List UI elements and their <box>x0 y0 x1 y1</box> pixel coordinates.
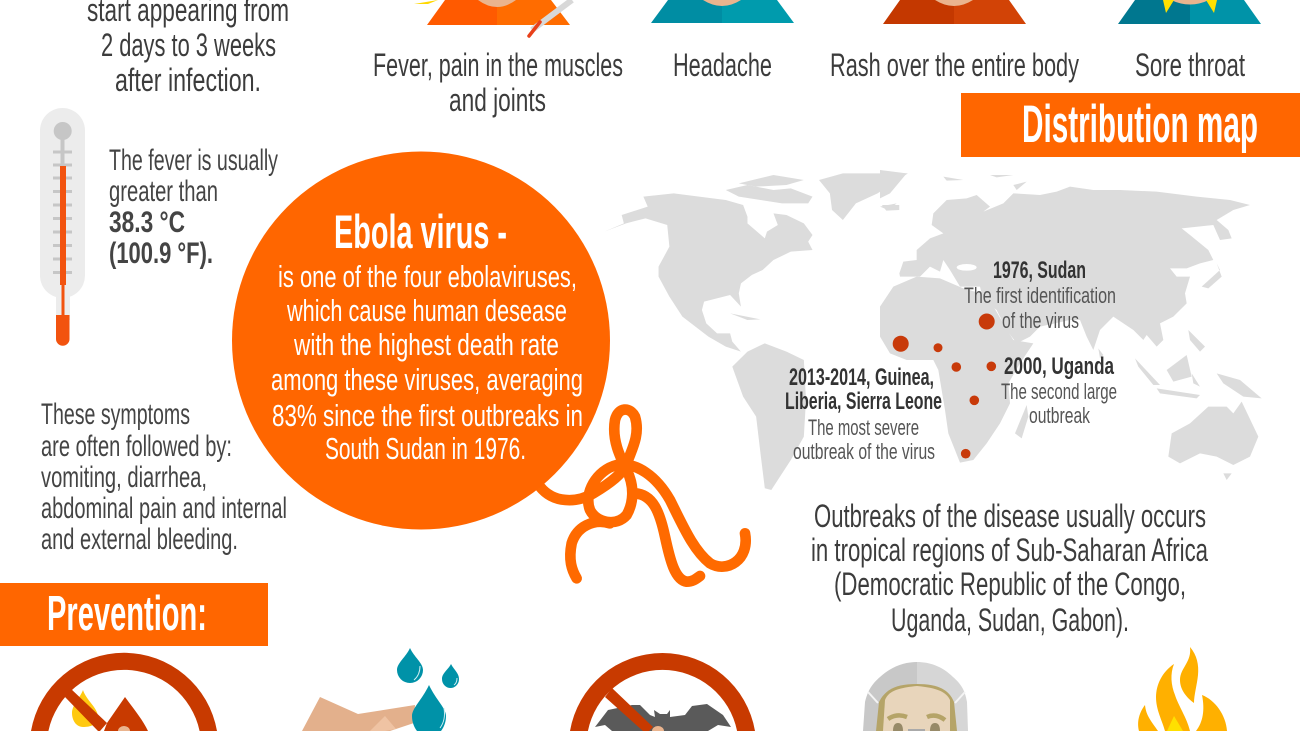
symptom intro text: 2 days to 3 weeks <box>101 27 276 63</box>
map label: 2000 Uganda <box>1001 353 1117 428</box>
map label: 2013-2014: outbreak of the virus <box>793 439 935 464</box>
outbreaks paragraph <box>811 498 1208 638</box>
icon: hand washing with water drops <box>302 648 459 731</box>
map label: 2000 Uganda: outbreak <box>1029 403 1091 428</box>
outbreaks paragraph: Uganda, Sudan, Gabon). <box>891 602 1129 638</box>
symptom labels <box>373 47 1245 118</box>
follow-up symptoms text <box>41 398 287 556</box>
panel: Ebola virus definition circle: is one of the four ebolaviruses, <box>278 259 577 294</box>
fever text: (100.9 °F). <box>109 237 213 270</box>
icon: person with headache <box>651 0 794 23</box>
outbreak markers <box>893 314 996 459</box>
fever text: 38.3 °C <box>109 206 185 239</box>
icon: no contact with fire and blood <box>31 653 217 731</box>
heading: prevention: Prevention: <box>47 587 207 641</box>
map label: 1976 Sudan: The first identification <box>964 283 1116 308</box>
icon: no contact with bats <box>570 653 755 731</box>
map label: 1976 Sudan <box>964 257 1116 333</box>
panel: Ebola virus definition circle <box>232 152 610 530</box>
icon: person with fever <box>414 0 572 36</box>
icon: person with sore throat <box>1118 0 1261 24</box>
icon: virus strand <box>540 410 746 582</box>
world map: Eurasia, Africa and Australia <box>880 170 1262 480</box>
map label: 2000 Uganda: The second large <box>1001 379 1117 404</box>
map label: 2013-2014: 2013-2014, Guinea, <box>789 364 934 391</box>
symptom intro text <box>87 0 289 98</box>
panel: Ebola virus definition circle: South Sudan in 1976. <box>325 431 526 466</box>
follow-up symptoms text: abdominal pain and internal <box>41 492 287 525</box>
icon: thermometer <box>40 108 85 346</box>
follow-up symptoms text: and external bleeding. <box>41 523 238 556</box>
fever text: The fever is usually <box>109 144 278 177</box>
symptom labels: Fever, pain in the muscles <box>373 47 623 83</box>
panel: Ebola virus definition circle: 83% since the first outbreaks in <box>272 398 583 433</box>
world map: Americas and Greenland <box>604 173 908 490</box>
icon: fire <box>1138 647 1227 731</box>
panel: Ebola virus definition circle: which cause human desease <box>286 293 567 328</box>
map label: 1976 Sudan: of the virus <box>1002 308 1079 333</box>
symptom labels: Sore throat <box>1135 47 1245 83</box>
panel: Ebola virus definition circle: among these viruses, averaging <box>271 362 583 397</box>
map label: 2013-2014: Liberia, Sierra Leone <box>785 388 942 415</box>
heading: prevention <box>0 583 268 646</box>
map label: 2013-2014 <box>785 364 942 464</box>
panel: Ebola virus definition circle: with the highest death rate <box>293 327 559 362</box>
panel: Ebola virus definition circle: Ebola virus - <box>334 205 507 258</box>
symptom labels: Headache <box>673 47 772 83</box>
icon: person in protective suit <box>863 662 968 731</box>
map label: 1976 Sudan: 1976, Sudan <box>993 257 1086 284</box>
fever text <box>109 144 278 270</box>
symptom labels: Rash over the entire body <box>830 47 1079 83</box>
map label: 2013-2014: The most severe <box>808 415 919 440</box>
fever text: greater than <box>109 175 218 208</box>
icon: person with rash <box>883 0 1026 24</box>
follow-up symptoms text: vomiting, diarrhea, <box>41 461 207 494</box>
follow-up symptoms text: These symptoms <box>41 398 190 431</box>
map label: 2000 Uganda: 2000, Uganda <box>1004 353 1114 380</box>
symptom intro text: after infection. <box>115 62 261 98</box>
follow-up symptoms text: are often followed by: <box>41 430 232 463</box>
symptom labels: and joints <box>449 82 546 118</box>
